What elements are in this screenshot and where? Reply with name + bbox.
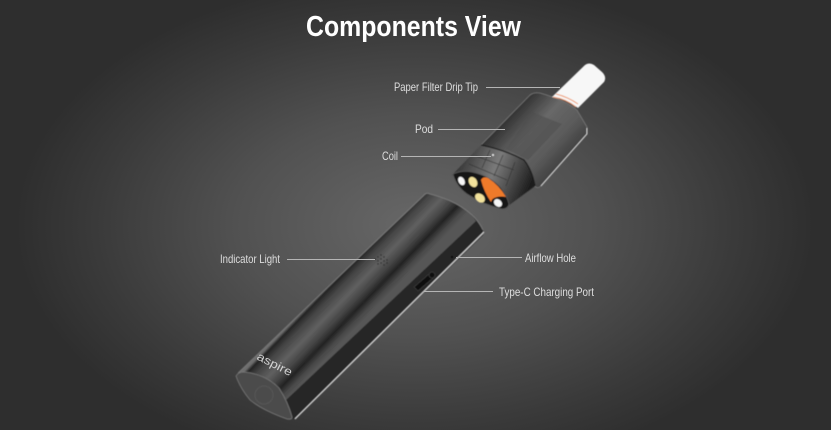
yellow contact bottom <box>473 191 487 205</box>
coil band line <box>481 145 535 186</box>
indicator light dots <box>374 254 388 266</box>
white contact right <box>492 197 504 209</box>
callout: airflow hole: Airflow Hole <box>525 251 576 265</box>
callout: pod <box>415 122 505 136</box>
pod shell <box>481 93 587 188</box>
callout: coil <box>382 149 491 163</box>
paper filter drip tip <box>552 64 605 108</box>
coil highlight <box>492 154 494 156</box>
callout: type-c charging port: Type-C Charging Port <box>499 285 595 299</box>
end cap logo mark <box>255 386 273 404</box>
callout: paper filter drip tip: Paper Filter Drip Tip <box>394 80 478 94</box>
port button <box>429 272 435 278</box>
orange air intake <box>481 177 506 202</box>
pod right bright edge <box>541 128 587 186</box>
body lower bright edge <box>295 232 484 419</box>
white tube <box>552 64 605 108</box>
body top surface <box>238 193 476 400</box>
device: battery body <box>236 193 484 419</box>
callout: airflow hole <box>456 251 576 265</box>
airflow hole <box>451 256 453 258</box>
yellow contact top <box>467 175 479 189</box>
body upper rim <box>238 193 483 373</box>
callout: pod: Pod <box>415 122 433 136</box>
orange print ring <box>553 94 578 107</box>
end cap <box>236 372 292 419</box>
pod inner tank <box>506 112 562 160</box>
front face <box>453 171 509 209</box>
coil detail <box>469 150 515 186</box>
white contact left <box>457 176 466 186</box>
title: Components View <box>306 11 521 43</box>
callout: coil: Coil <box>382 149 398 163</box>
coil section <box>452 145 535 206</box>
pod assembly <box>452 64 605 209</box>
callout: indicator light: Indicator Light <box>220 252 281 266</box>
type-c charging port <box>414 274 433 291</box>
aspire logo: aspire <box>255 351 294 379</box>
body side face <box>280 208 483 419</box>
